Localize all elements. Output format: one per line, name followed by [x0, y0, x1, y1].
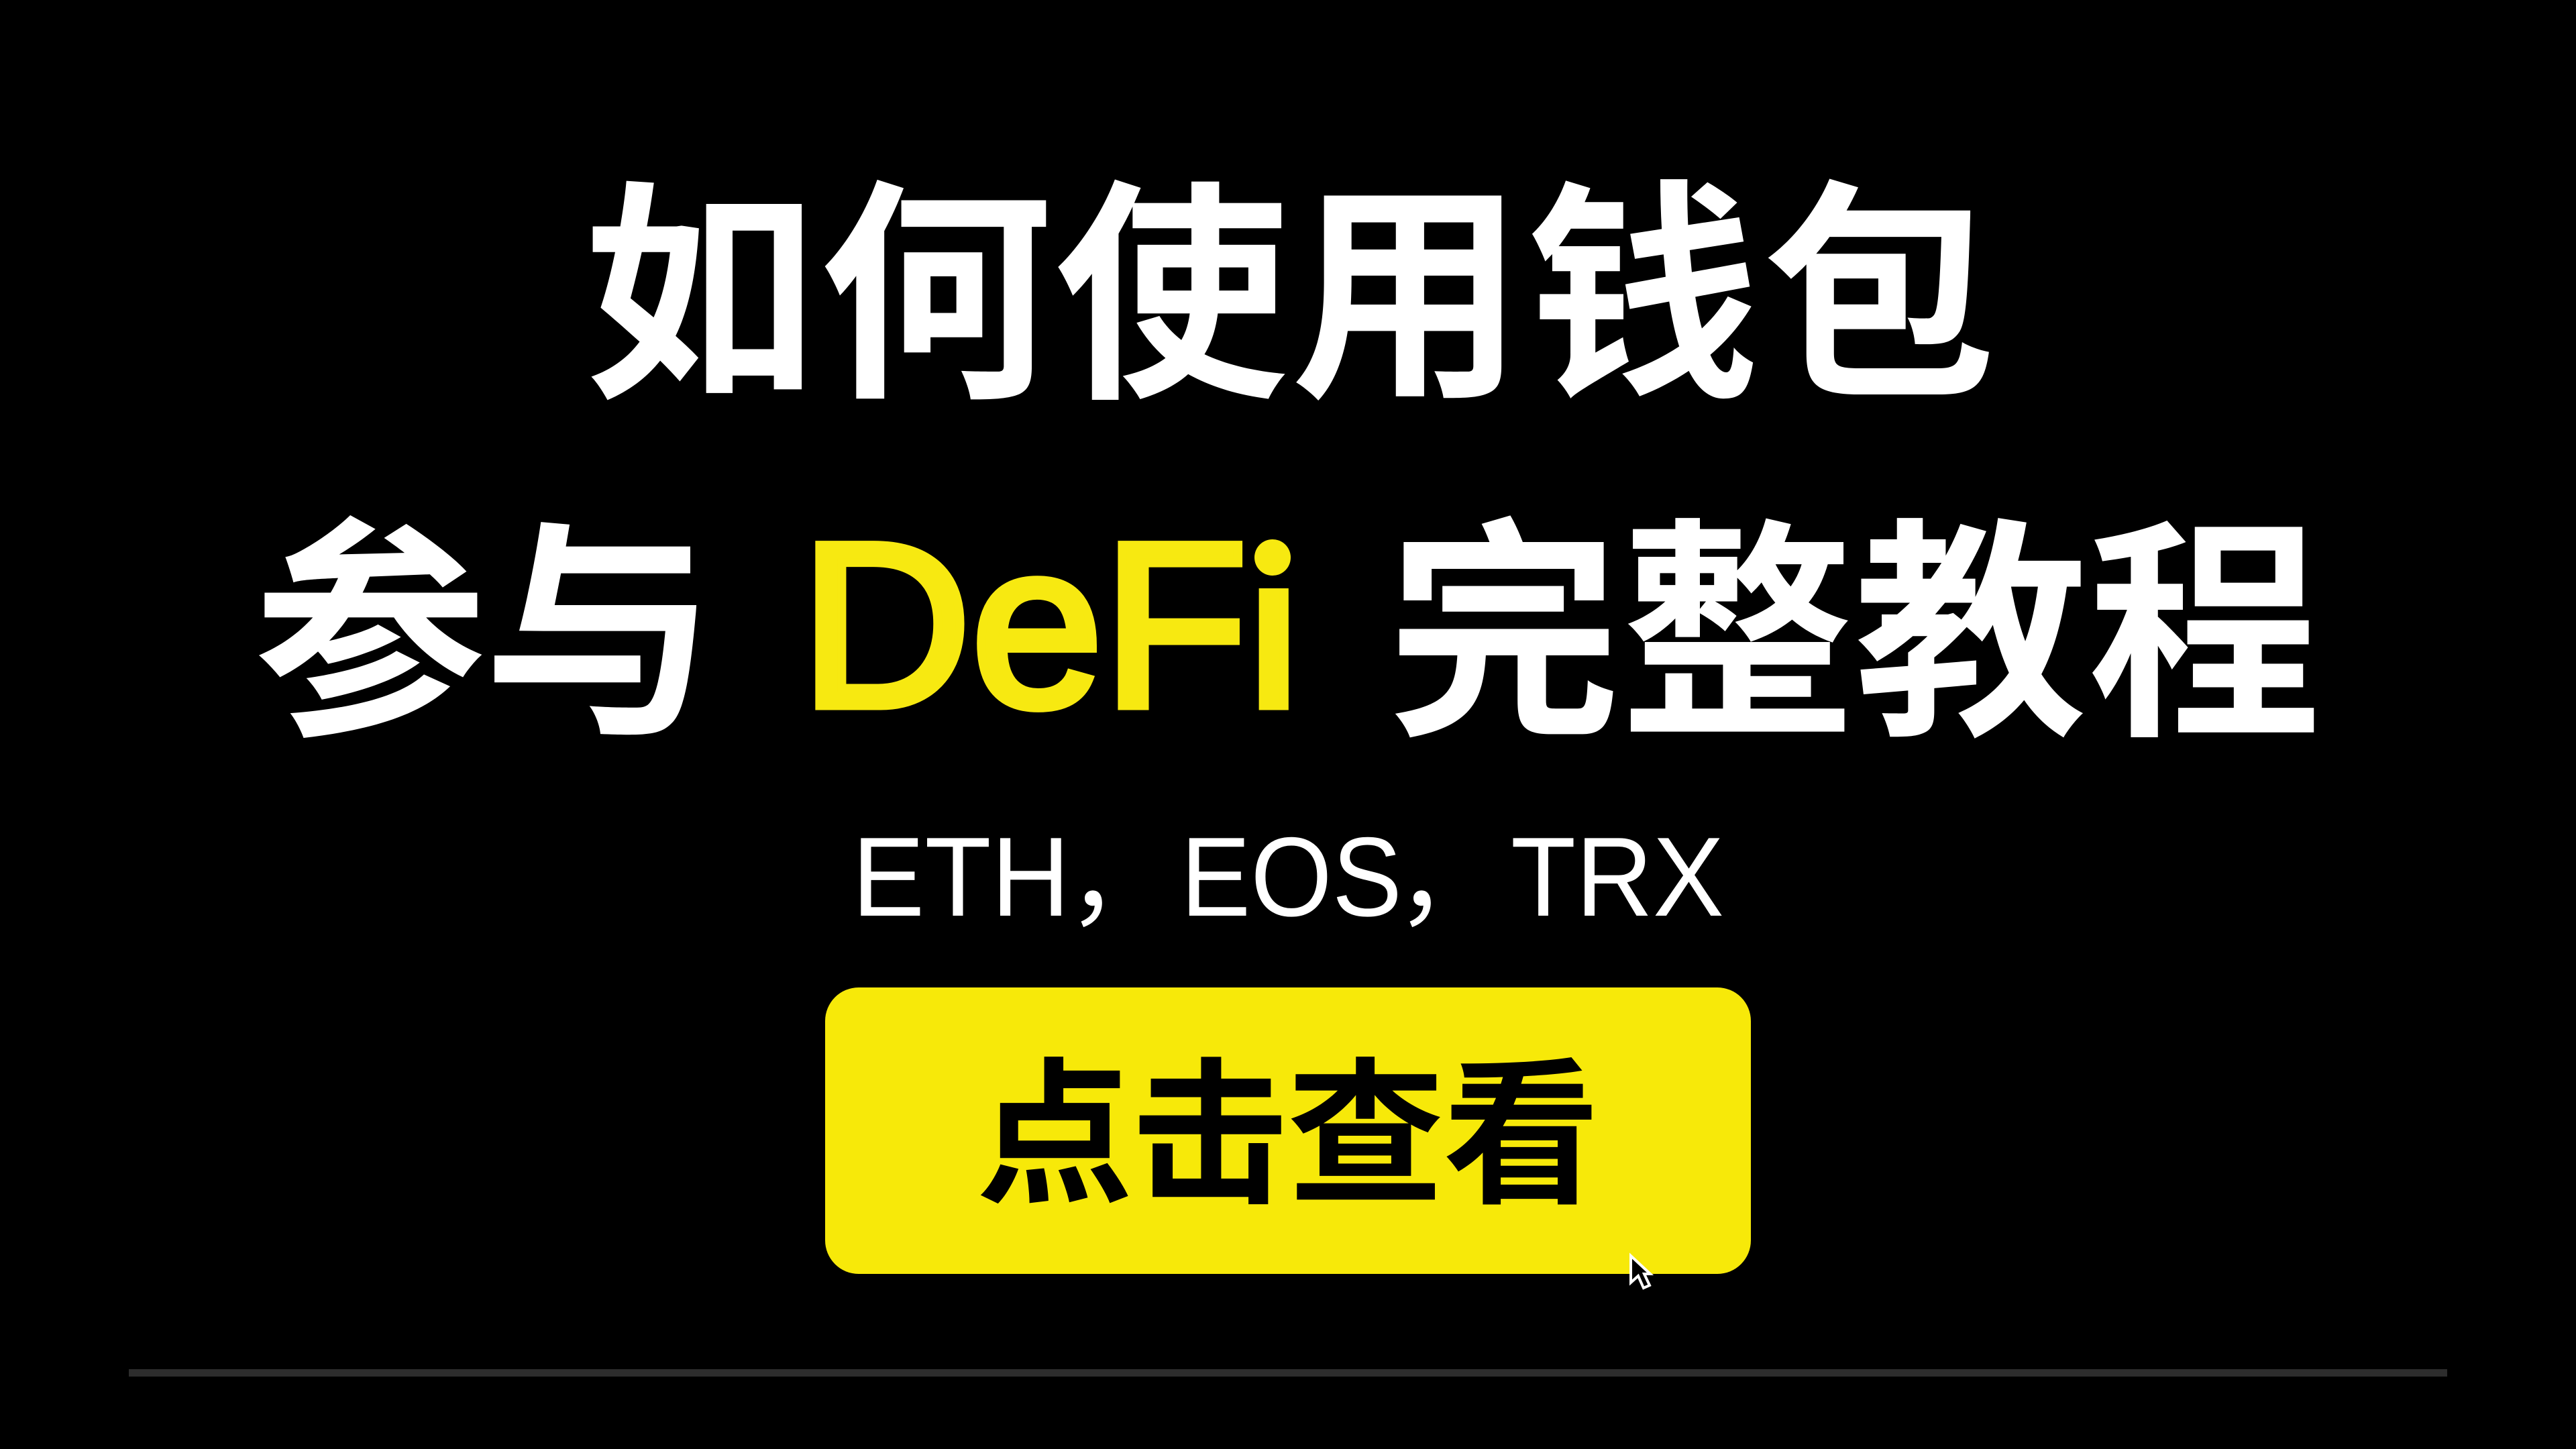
subtitle: supported chains: TRX	[1511, 814, 1724, 940]
subtitle: supported chains	[852, 814, 1724, 940]
subtitle: supported chains: ，	[1067, 818, 1174, 938]
subtitle: supported chains: ETH	[852, 814, 1070, 940]
subtitle: supported chains: EOS	[1181, 814, 1402, 940]
button background	[825, 987, 1751, 1274]
progress bar	[129, 1369, 2447, 1377]
title line 1: 如何使用钱包	[584, 167, 1996, 428]
title line 2	[254, 494, 2321, 766]
icon: mouse cursor	[1631, 1256, 1650, 1288]
subtitle: supported chains: ，	[1395, 818, 1503, 938]
title: 完整教程: 完整教程	[1387, 505, 2321, 766]
button	[825, 987, 1751, 1274]
title: 参与: 参与	[254, 505, 716, 766]
title: DeFi highlight: DeFi	[800, 494, 1300, 755]
button label: 点击查看	[976, 1048, 1600, 1224]
